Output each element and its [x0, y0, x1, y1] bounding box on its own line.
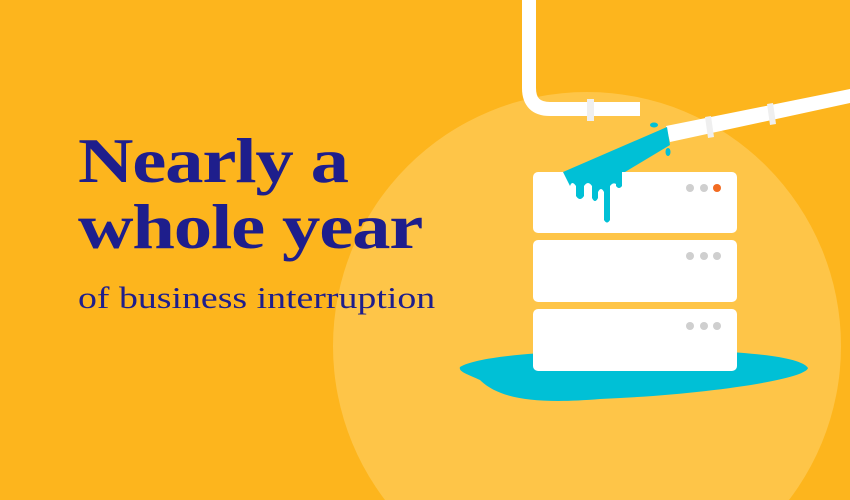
title: Nearly a	[78, 125, 348, 196]
background circle	[333, 92, 841, 500]
puddle	[460, 350, 808, 401]
title	[78, 125, 422, 262]
water stream	[563, 122, 670, 222]
subtitle: of business interruption	[78, 280, 435, 315]
title: whole year	[78, 191, 422, 262]
diagonal pipe	[666, 89, 850, 142]
vertical pipe	[529, 0, 640, 121]
servers	[533, 172, 737, 371]
